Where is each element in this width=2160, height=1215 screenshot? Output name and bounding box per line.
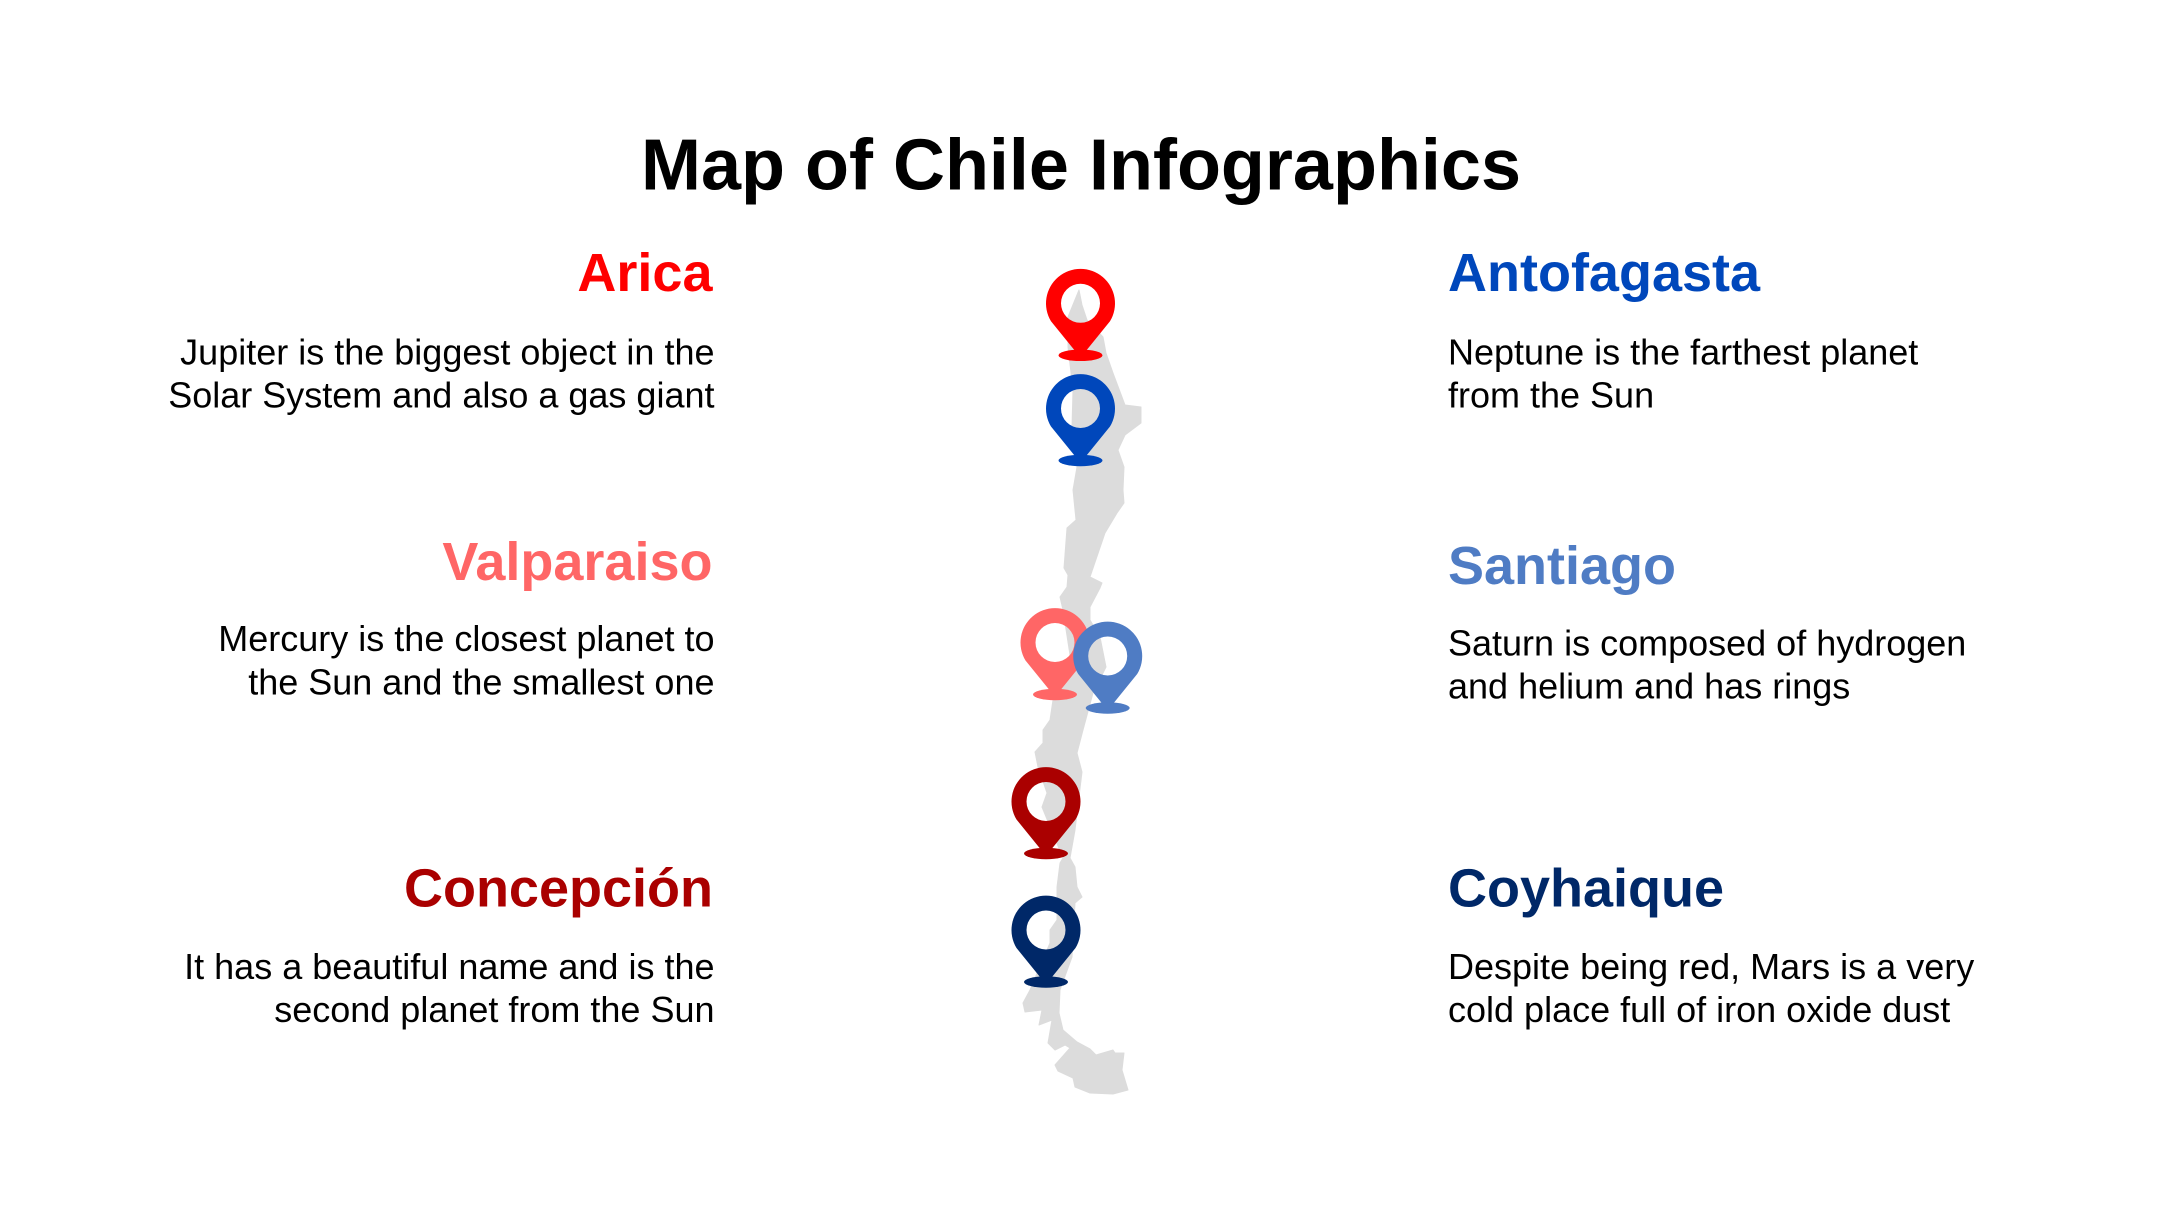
heading: Concepción: Concepción [404, 858, 713, 918]
panel: Concepción [184, 858, 714, 1030]
icon: Arica pin [1046, 269, 1115, 361]
text: Antofagasta description: from the Sun [1448, 374, 1654, 416]
heading: Arica: Arica [577, 243, 713, 303]
text: Arica description: Jupiter is the biggest object in the [180, 332, 714, 372]
heading: Coyhaique: Coyhaique [1448, 858, 1724, 918]
title: Map of Chile Infographics [641, 126, 1521, 206]
panel: Arica [168, 243, 714, 416]
icon: Coyhaique pin [1012, 896, 1080, 988]
text: Coyhaique description: cold place full of iron oxide dust [1448, 989, 1950, 1030]
panel: Valparaiso [218, 532, 714, 702]
icon: Valparaiso pin [1020, 608, 1090, 700]
icon: Concepción pin [1012, 767, 1080, 859]
text: Santiago description: and helium and has rings [1448, 666, 1850, 706]
heading: Valparaiso: Valparaiso [442, 532, 712, 592]
text: Antofagasta description: Neptune is the farthest planet [1448, 332, 1918, 372]
text: Concepción description: second planet from the Sun [274, 989, 714, 1030]
panel: Antofagasta [1448, 243, 1918, 416]
panel: Coyhaique [1448, 858, 1974, 1030]
text: Valparaiso description: Mercury is the closest planet to [218, 618, 714, 659]
text: Santiago description: Saturn is composed of hydrogen [1448, 622, 1966, 664]
text: Concepción description: It has a beautiful name and is the [184, 946, 714, 987]
icon: Santiago pin [1073, 622, 1142, 714]
heading: Santiago: Santiago [1448, 536, 1676, 596]
icon: Antofagasta pin [1046, 374, 1115, 466]
text: Coyhaique description: Despite being red, Mars is a very [1448, 946, 1974, 987]
map of Chile [1023, 290, 1141, 1094]
heading: Antofagasta: Antofagasta [1448, 243, 1761, 303]
panel: Santiago [1448, 536, 1966, 706]
text: Arica description: Solar System and also a gas giant [168, 374, 714, 416]
text: Valparaiso description: the Sun and the smallest one [248, 662, 714, 702]
